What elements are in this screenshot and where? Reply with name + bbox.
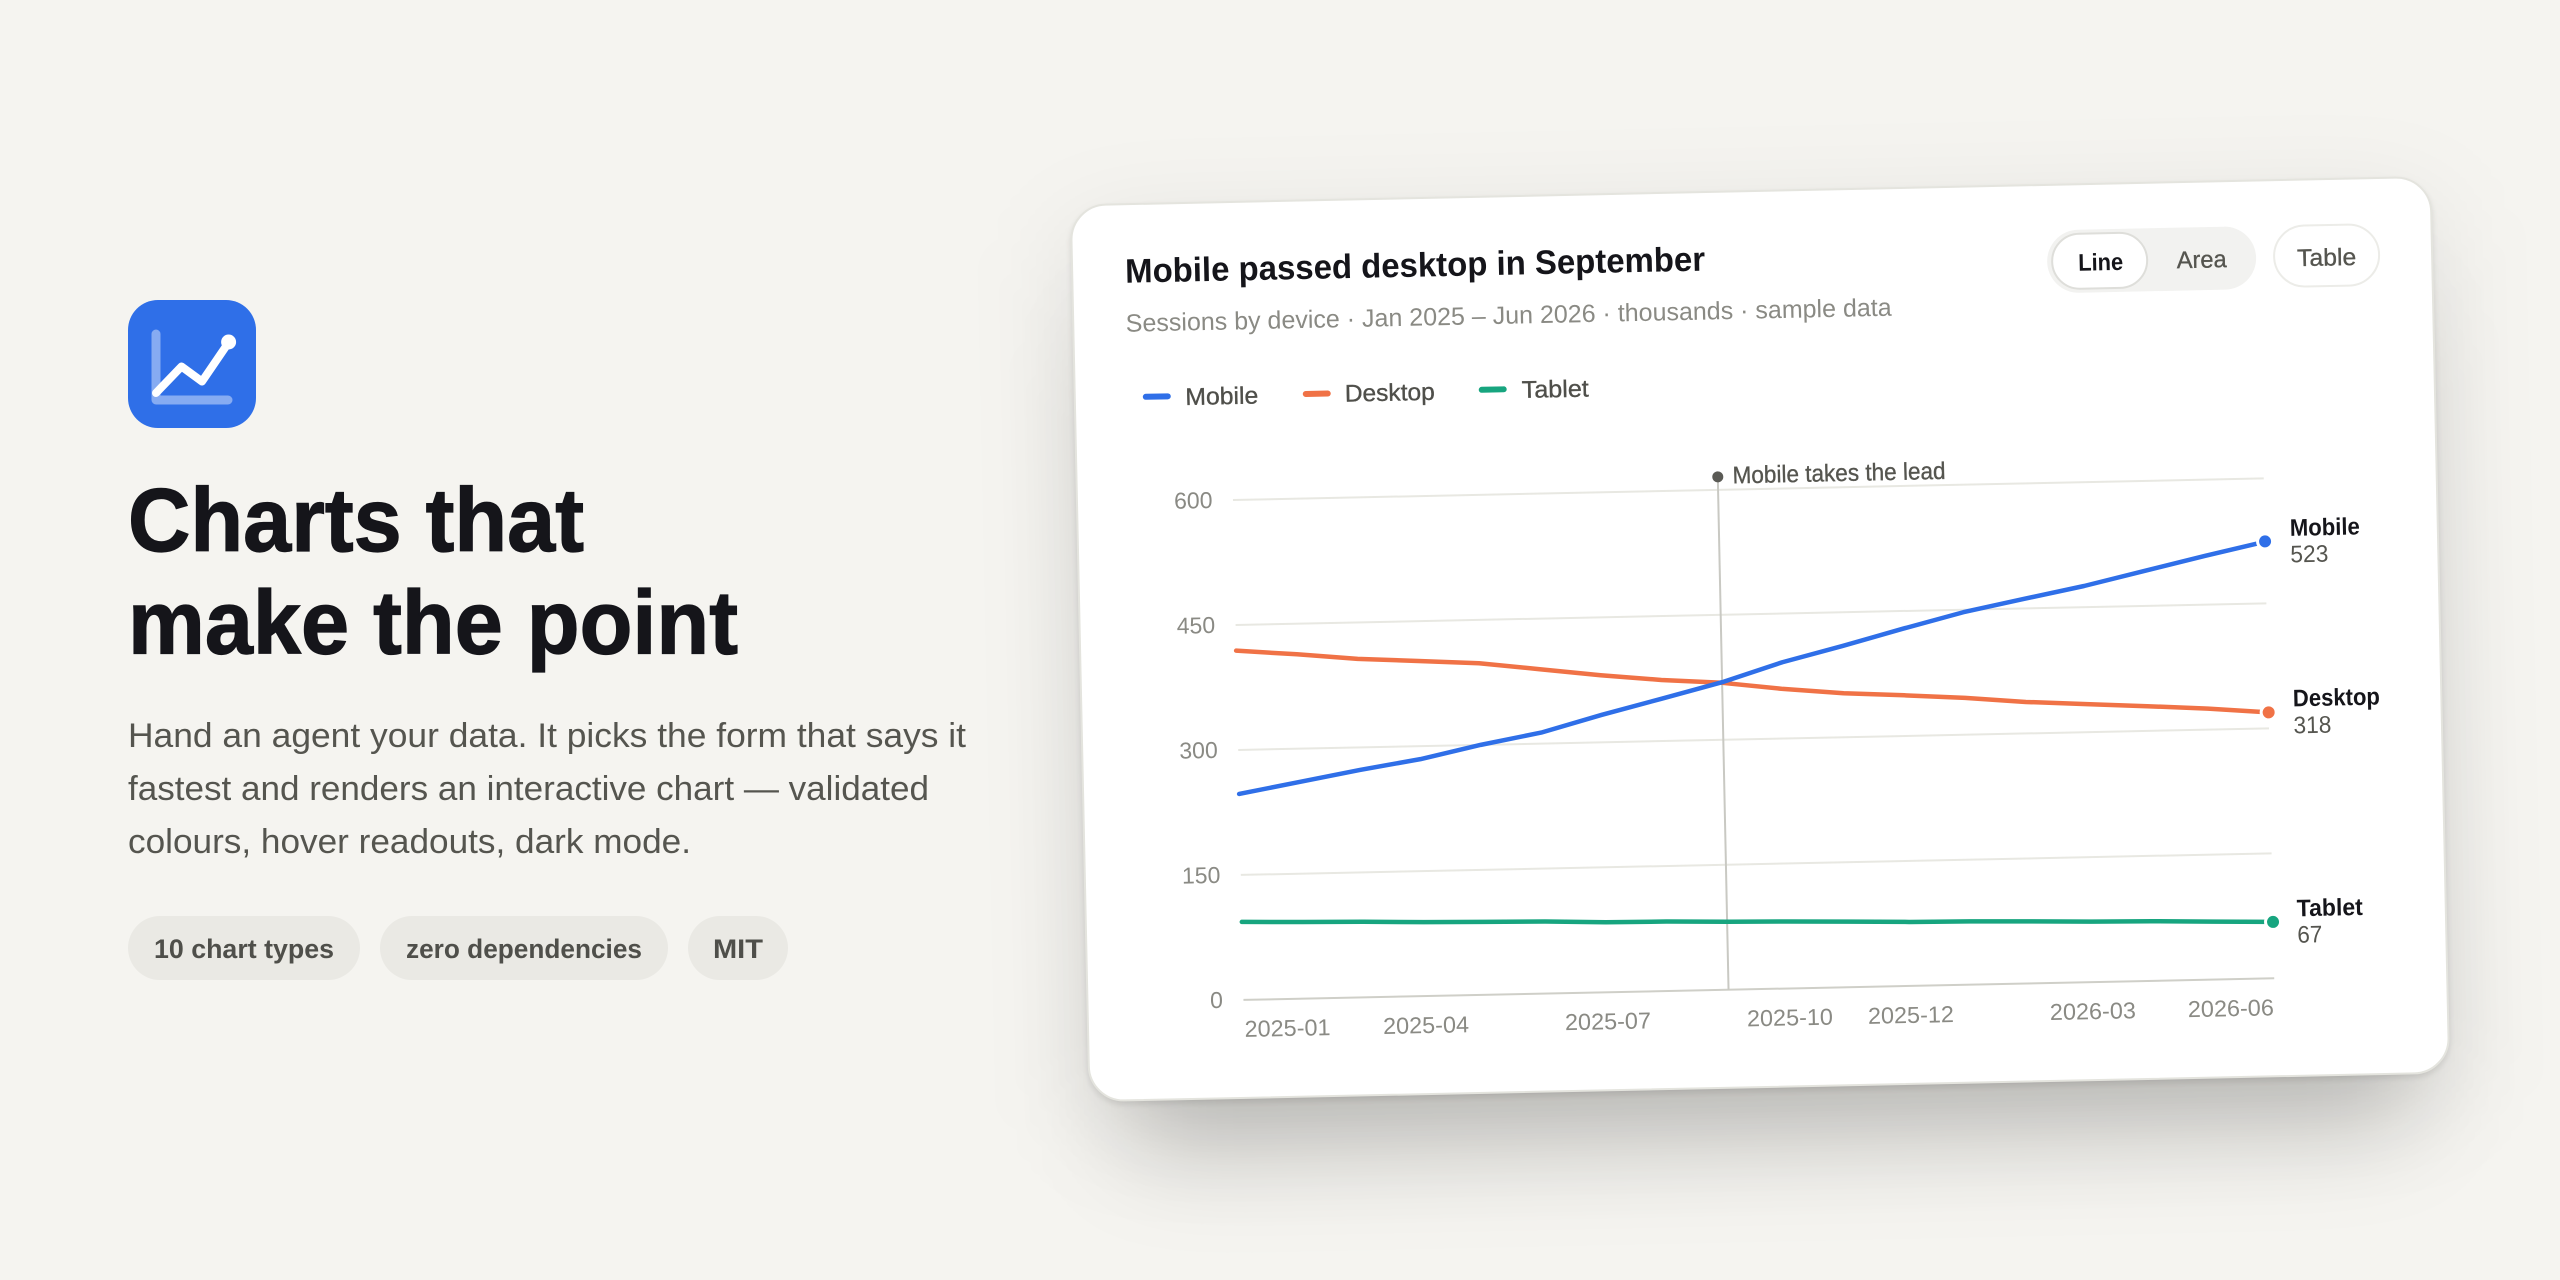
y axis grid lines (1233, 478, 2274, 1000)
end label: tablet (2265, 894, 2364, 949)
pill: chart types (128, 916, 360, 980)
view toggle: line / area: Area (2176, 246, 2228, 274)
x axis labels: 2025-12 (1868, 1001, 1954, 1029)
end label: mobile (2257, 513, 2361, 569)
end label: desktop: 318 (2293, 712, 2332, 739)
series: mobile (1234, 542, 2270, 794)
end label: tablet: Tablet (2296, 894, 2363, 922)
x axis labels: 2026-03 (2050, 997, 2136, 1025)
end label: desktop (2261, 684, 2381, 740)
x axis labels: 2025-10 (1747, 1004, 1833, 1031)
description paragraph: colours, hover readouts, dark mode. (128, 823, 691, 861)
x axis labels: 2026-06 (2188, 994, 2274, 1022)
series: tablet (1242, 900, 2273, 944)
x axis labels: 2025-01 (1244, 1014, 1331, 1042)
legend item: desktop (1306, 379, 1435, 408)
title: make the point (128, 574, 738, 674)
card subtitle: Sessions by device · Jan 2025 – Jun 2026 · thousands · sample data (1125, 294, 1892, 338)
table button (2273, 224, 2380, 287)
end label: tablet: 67 (2297, 921, 2323, 949)
x axis labels (1244, 994, 2274, 1042)
panel: tilted chart card (1070, 176, 2450, 1102)
end label: mobile: Mobile (2290, 513, 2360, 542)
y axis labels: 300 (1179, 737, 1218, 764)
legend item: mobile (1146, 382, 1259, 412)
series: desktop (1236, 629, 2269, 734)
y axis labels (1174, 487, 1223, 1014)
description paragraph: Hand an agent your data. It picks the form that says it (128, 717, 967, 755)
legend item: tablet: Tablet (1521, 376, 1589, 404)
pill: zero dependencies: zero dependencies (406, 934, 642, 964)
legend (1146, 376, 1589, 412)
x axis labels: 2025-07 (1565, 1007, 1651, 1035)
legend item: desktop: Desktop (1344, 379, 1435, 408)
end label: desktop: Desktop (2293, 684, 2380, 712)
end label: mobile: 523 (2290, 541, 2329, 568)
table button: Table (2297, 244, 2356, 272)
pill: chart types: 10 chart types (154, 934, 334, 964)
y axis labels: 150 (1182, 862, 1221, 889)
left column: hero (128, 300, 967, 980)
annotation: mobile takes the lead: Mobile takes the lead (1732, 458, 1946, 489)
y axis labels: 600 (1174, 487, 1213, 514)
pill: MIT (688, 916, 788, 980)
icon: line chart app tile (128, 300, 256, 428)
pill: MIT: MIT (713, 934, 764, 964)
description paragraph (128, 717, 967, 861)
description paragraph: fastest and renders an interactive chart — validated (128, 770, 929, 808)
view toggle: line / area (2047, 226, 2257, 293)
y axis labels: 0 (1210, 987, 1223, 1013)
y axis labels: 450 (1176, 612, 1215, 639)
title (128, 471, 738, 674)
feature pills (128, 916, 788, 980)
legend item: mobile: Mobile (1185, 382, 1259, 411)
line chart (1174, 449, 2387, 1043)
annotation: mobile takes the lead (1712, 458, 1956, 990)
pill: zero dependencies (380, 916, 668, 980)
x axis labels: 2025-04 (1383, 1011, 1469, 1039)
card heading: Mobile passed desktop in September (1125, 241, 1705, 291)
view toggle: line / area: Line (2078, 249, 2123, 277)
legend item: tablet (1481, 376, 1589, 405)
title: Charts that (128, 471, 584, 571)
